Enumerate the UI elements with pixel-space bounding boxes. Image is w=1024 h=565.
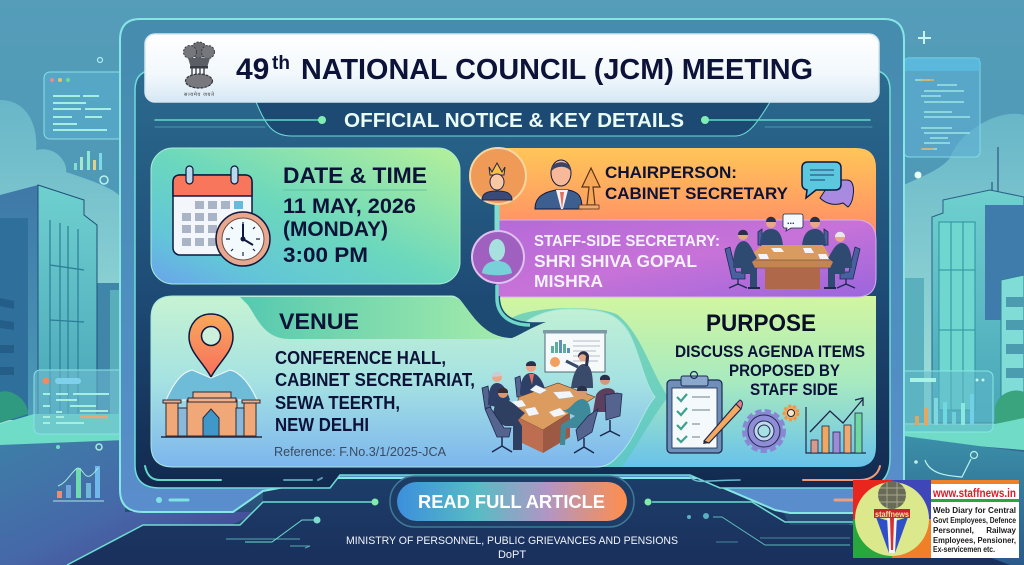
badge logo: staffnews [875, 509, 909, 519]
staff-side text: MISHRA [534, 271, 603, 291]
faces [738, 218, 845, 242]
far people [760, 229, 826, 246]
speech bubble [783, 214, 803, 231]
venue text [275, 348, 475, 435]
right person [593, 375, 622, 436]
far building [97, 283, 135, 423]
circuit lines [67, 498, 930, 565]
icon: chairperson badge [470, 148, 526, 204]
small network line [915, 452, 978, 477]
panel: venue [151, 296, 655, 467]
panel: date and time [151, 148, 460, 284]
subtitle: OFFICIAL NOTICE & KEY DETAILS [344, 110, 684, 132]
purpose content [667, 310, 866, 453]
venue heading band [240, 297, 512, 339]
ground [904, 418, 1024, 450]
cloud [904, 114, 1024, 440]
badge logo [853, 480, 931, 558]
inner dark panel [135, 70, 890, 488]
front-left person [485, 388, 525, 452]
venue text: CABINET SECRETARIAT, [275, 370, 475, 390]
date text: 11 MAY, 2026 [283, 195, 416, 218]
outer frame [120, 19, 904, 513]
road [760, 436, 1024, 565]
venue text: CONFERENCE HALL, [275, 348, 446, 368]
connector between person circles [497, 200, 530, 325]
icon: chairperson figure [535, 160, 600, 209]
chairs [725, 229, 860, 279]
staff-side text: SHRI SHIVA GOPAL [534, 251, 697, 271]
meeting illustration: ... [787, 216, 795, 226]
lower code panel [34, 370, 134, 434]
code panel [44, 72, 134, 139]
bush [995, 391, 1024, 425]
footer: MINISTRY OF PERSONNEL, PUBLIC GRIEVANCES AND PENSIONS [346, 535, 678, 547]
notch connector [457, 296, 546, 338]
footer [346, 535, 678, 561]
panel: purpose background [470, 296, 876, 467]
icon: clock [216, 212, 270, 266]
icon: pencil [703, 400, 742, 444]
sparkle plus [918, 31, 931, 44]
date text [283, 163, 427, 267]
national emblem: सत्यमेव जयते [184, 91, 214, 98]
bottom dark tech area [67, 470, 1010, 565]
glow dot [914, 172, 922, 178]
purpose text [675, 343, 865, 399]
purpose text: STAFF SIDE [750, 381, 838, 399]
badge text: Web Diary for Central [933, 506, 1016, 515]
presentation board [543, 330, 607, 372]
main building [932, 147, 1024, 423]
icon: monument [161, 392, 262, 437]
cloud [0, 100, 122, 440]
purpose text: PROPOSED BY [729, 362, 840, 380]
purpose text: DISCUSS AGENDA ITEMS [675, 343, 865, 361]
panel: chairperson [497, 148, 876, 240]
far building [892, 278, 924, 423]
staff-side text [534, 233, 720, 291]
lower chart panel [895, 371, 993, 432]
footer: DoPT [498, 549, 526, 561]
back chairs [482, 376, 523, 408]
right cityscape [760, 31, 1024, 565]
chairperson text [605, 163, 789, 203]
icon: clipboard [667, 372, 722, 453]
panel: staff-side secretary [497, 214, 876, 297]
read full article button [390, 476, 634, 527]
icon: gears [745, 406, 798, 450]
front-right person [560, 386, 598, 453]
reference text: Reference: F.No.3/1/2025-JCA [274, 445, 447, 459]
title card [145, 34, 879, 102]
icon: location pin [189, 314, 233, 377]
venue text: NEW DELHI [275, 415, 369, 435]
table [745, 245, 832, 260]
badge text: Railway [986, 526, 1017, 535]
icon: staff-side badge [472, 231, 524, 283]
badge text: Employees, Pensioner, [933, 536, 1016, 545]
chairperson text: CABINET SECRETARY [605, 184, 789, 203]
icon: calendar [173, 166, 252, 255]
icon: chat bubbles [802, 162, 853, 207]
badge text [931, 480, 1019, 554]
code panel [904, 58, 980, 157]
title card: NATIONAL COUNCIL (JCM) MEETING [301, 54, 813, 86]
title text: 49 [236, 53, 269, 86]
conference illustration [482, 330, 622, 453]
purpose heading: PURPOSE [706, 310, 816, 337]
road [0, 440, 260, 565]
date text: DATE & TIME [283, 163, 427, 188]
bush [0, 391, 28, 423]
venue text: SEWA TEERTH, [275, 393, 400, 413]
badge text: Ex-servicemen etc. [933, 545, 995, 554]
back-left people [488, 361, 546, 408]
badge text: Personnel, [933, 526, 974, 535]
title text: th [272, 53, 290, 74]
read full article button: READ FULL ARTICLE [418, 492, 605, 512]
icon: map dome [166, 370, 257, 400]
papers [758, 248, 829, 259]
date text: (MONDAY) [283, 218, 388, 241]
side people [733, 241, 852, 288]
table [510, 383, 595, 453]
ground [0, 414, 125, 445]
date text: 3:00 PM [283, 244, 368, 267]
presenter [566, 351, 593, 388]
small line chart [53, 444, 104, 501]
chairperson text: CHAIRPERSON: [605, 163, 737, 182]
side building [1001, 275, 1024, 423]
staffnews badge [853, 480, 1019, 558]
left cityscape [0, 58, 260, 565]
decorative connector lines with dots [155, 116, 872, 127]
venue heading: VENUE [279, 309, 359, 334]
subtitle band [155, 102, 872, 136]
venue callout shadow band [500, 308, 668, 467]
icon: growth chart [806, 398, 866, 453]
mini bar chart [74, 58, 108, 184]
national emblem [184, 42, 214, 98]
meeting illustration [725, 214, 860, 289]
main building [0, 185, 97, 420]
frame accents [145, 466, 880, 503]
staff-side text: STAFF-SIDE SECRETARY: [534, 233, 720, 250]
